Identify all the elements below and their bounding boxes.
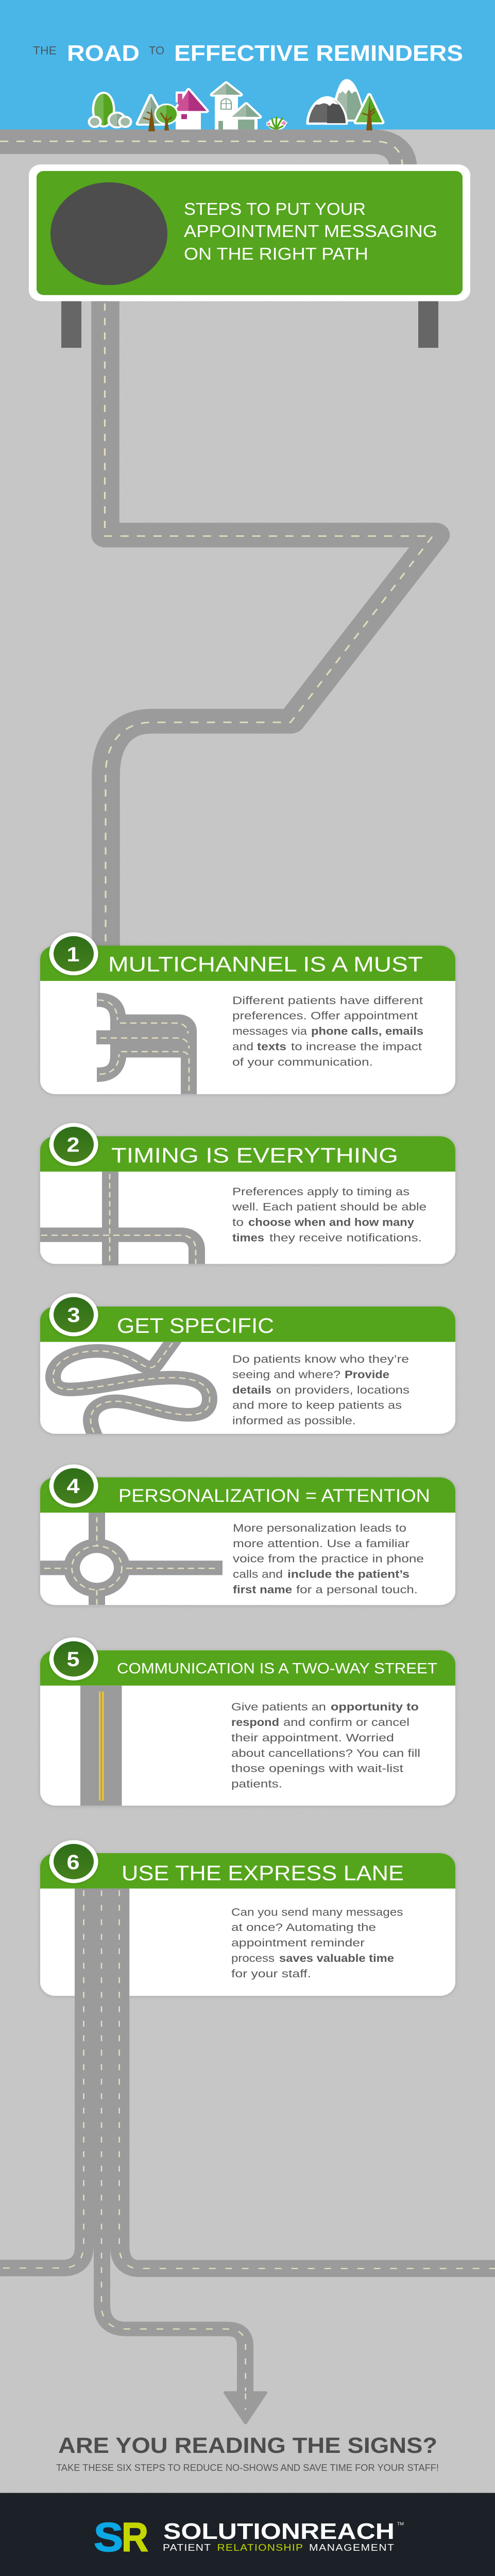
- road illustration 5: two-way street: [80, 1686, 122, 1806]
- body text 3: Provide: [345, 1368, 389, 1381]
- body text 5: opportunity to: [331, 1701, 419, 1713]
- heading 1: MULTICHANNEL IS A MUST: [108, 953, 423, 976]
- arrow lane marking: [245, 2394, 246, 2410]
- body text 6: for your staff.: [231, 1968, 311, 1980]
- tagline: [163, 2543, 394, 2553]
- icon: green pine tree: [356, 95, 382, 130]
- body text 3: [232, 1353, 409, 1427]
- sign text: STEPS TO PUT YOUR: [184, 199, 366, 219]
- lane marking: centre: [101, 1890, 246, 2391]
- road: fill between lanes: [75, 1889, 129, 2246]
- body text 1: Different patients have different: [232, 994, 423, 1007]
- top road: [0, 141, 403, 167]
- road: centre branch: [102, 1889, 245, 2396]
- body text 2: to: [232, 1216, 244, 1228]
- body text 2: they receive notifications.: [269, 1232, 422, 1244]
- tagline: RELATIONSHIP: [217, 2543, 303, 2553]
- badge 5: [49, 1637, 98, 1681]
- sign text: [184, 199, 437, 264]
- body text 5: [231, 1701, 420, 1790]
- body text 5: about cancellations? You can fill: [231, 1747, 420, 1759]
- body text 1: [232, 994, 423, 1068]
- road: right branch: [120, 1889, 495, 2268]
- body text 6: process: [231, 1952, 275, 1964]
- panel: step 2: [40, 1123, 455, 1265]
- tagline: MANAGEMENT: [309, 2543, 394, 2553]
- body text 4: voice from the practice in phone: [233, 1553, 424, 1565]
- heading 6: USE THE EXPRESS LANE: [122, 1862, 404, 1885]
- closing subheading: TAKE THESE SIX STEPS TO REDUCE NO-SHOWS AND SAVE TIME FOR YOUR STAFF!: [56, 2463, 439, 2473]
- body text 3: details: [232, 1384, 271, 1396]
- badge 1: [49, 933, 98, 975]
- body text 1: to increase the impact: [291, 1041, 422, 1053]
- body text 2: [232, 1185, 426, 1244]
- body text 4: more attention. Use a familiar: [233, 1537, 410, 1549]
- brand name: SOLUTIONREACH: [163, 2518, 395, 2544]
- arrowhead: [225, 2393, 266, 2423]
- tagline: PATIENT: [163, 2543, 211, 2553]
- heading 5: COMMUNICATION IS A TWO-WAY STREET: [117, 1660, 437, 1677]
- title: THE: [33, 44, 57, 57]
- body text 5: patients.: [231, 1778, 282, 1790]
- body text 1: of your communication.: [232, 1056, 373, 1068]
- badge 6: 6: [66, 1851, 80, 1873]
- body text 2: well. Each patient should be able: [232, 1201, 426, 1213]
- icon: dark circle: [50, 182, 167, 285]
- body text 5: their appointment. Worried: [231, 1732, 394, 1744]
- badge 3: 3: [67, 1303, 80, 1326]
- body text 1: preferences. Offer appointment: [232, 1010, 418, 1022]
- tree trunks over road edge: [148, 129, 372, 131]
- badge 1: 1: [66, 943, 80, 966]
- body text 2: choose when and how many: [248, 1216, 414, 1228]
- body text 5: respond: [231, 1716, 279, 1728]
- road: left branch: [0, 1889, 84, 2268]
- title: TO: [149, 44, 164, 57]
- panel: step 1: [40, 933, 455, 1094]
- express lane roads and branches: [0, 1889, 495, 2423]
- body text 5: and confirm or cancel: [283, 1716, 409, 1728]
- title: ROAD: [67, 40, 140, 65]
- body text 1: texts: [257, 1041, 286, 1053]
- sign posts: [61, 299, 438, 348]
- title: EFFECTIVE REMINDERS: [174, 40, 463, 65]
- badge 3: [49, 1293, 98, 1336]
- logo mark: [94, 2514, 148, 2560]
- heading 2: TIMING IS EVERYTHING: [111, 1144, 398, 1167]
- heading 4: PERSONALIZATION = ATTENTION: [118, 1485, 430, 1505]
- icon: flowering bush: [267, 117, 287, 130]
- logo mark: S: [94, 2514, 123, 2560]
- icon: grey pine tree: [138, 96, 166, 131]
- body text 1: phone calls, emails: [311, 1025, 423, 1037]
- sky: [0, 0, 495, 129]
- body text 4: for a personal touch.: [296, 1584, 418, 1596]
- icon: small house: [232, 104, 260, 129]
- body text 6: appointment reminder: [231, 1937, 365, 1949]
- panel: step 3: [40, 1293, 455, 1438]
- icon: pink-roof house: [175, 90, 207, 129]
- winding road from sign to step 1: [105, 299, 436, 949]
- sign text: ON THE RIGHT PATH: [184, 244, 368, 264]
- body text 4: calls and: [233, 1568, 283, 1580]
- body text 3: Do patients know who they’re: [232, 1353, 409, 1365]
- body text 6: at once? Automating the: [231, 1922, 376, 1934]
- sign text: APPOINTMENT MESSAGING: [184, 222, 437, 241]
- body text 4: More personalization leads to: [233, 1522, 406, 1534]
- lane marking: left: [0, 1890, 83, 2268]
- closing heading: ARE YOU READING THE SIGNS?: [58, 2433, 437, 2458]
- badge 5: 5: [66, 1648, 80, 1670]
- body text 5: Give patients an: [231, 1701, 326, 1713]
- panel: step 5: [40, 1637, 455, 1806]
- badge 2: [49, 1123, 98, 1166]
- body text 3: and more to keep patients as: [232, 1399, 402, 1411]
- body text 3: seeing and where?: [232, 1368, 340, 1381]
- badge 4: [49, 1464, 98, 1507]
- body text 2: Preferences apply to timing as: [232, 1185, 409, 1197]
- road illustration 1: [96, 993, 197, 1094]
- body text 5: those openings with wait-list: [231, 1762, 404, 1774]
- body text 4: include the patient’s: [287, 1568, 409, 1580]
- body text 3: informed as possible.: [232, 1415, 356, 1427]
- icon: round green tree: [155, 104, 178, 130]
- body text 4: first name: [233, 1584, 292, 1596]
- body text 6: saves valuable time: [279, 1952, 394, 1964]
- body text 3: on providers, locations: [276, 1384, 409, 1396]
- badge 4: 4: [66, 1475, 80, 1498]
- badge 2: 2: [66, 1133, 80, 1156]
- road illustration 4: roundabout: [40, 1513, 223, 1605]
- footer: [0, 2493, 495, 2576]
- body text 6: [231, 1906, 403, 1980]
- body text 4: [233, 1522, 424, 1596]
- heading 3: GET SPECIFIC: [117, 1315, 274, 1337]
- body text 6: Can you send many messages: [231, 1906, 403, 1918]
- trademark: TM: [397, 2521, 404, 2526]
- body text 1: and: [232, 1041, 253, 1053]
- badge 6: [49, 1840, 98, 1883]
- panel: highway sign: [29, 164, 470, 301]
- body text 1: messages via: [232, 1025, 307, 1037]
- road illustration 3: [53, 1338, 210, 1438]
- body text 2: times: [232, 1232, 264, 1244]
- panel: step 4: [40, 1464, 455, 1605]
- scenery: trees, houses, mountains: [90, 80, 382, 131]
- icon: tall tree and bushes: [90, 94, 130, 126]
- road illustration 2: [40, 1172, 197, 1265]
- icon: tall white house: [212, 83, 241, 129]
- icon: mountains: [308, 80, 366, 124]
- panel: step 6: [40, 1840, 455, 1996]
- title: [33, 40, 463, 65]
- logo mark: R: [122, 2514, 148, 2560]
- lane marking: right: [120, 1890, 495, 2268]
